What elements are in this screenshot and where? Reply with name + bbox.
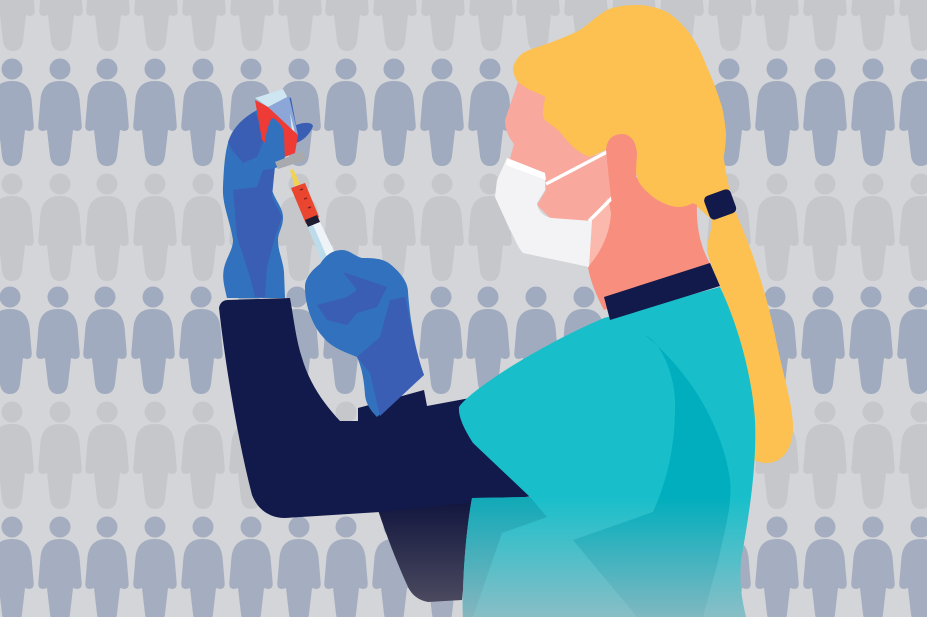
crowd row 3 (pale): [0, 174, 927, 281]
mask side shade: [588, 197, 611, 267]
mask ear straps: [546, 152, 616, 221]
crowd row 2 (blue): [0, 58, 927, 166]
arm sleeve: [219, 298, 535, 518]
crowd row 5 (pale): [0, 402, 927, 509]
hair: [513, 5, 726, 207]
fade overlay at the bottom of the scrub top: [462, 505, 750, 617]
mask top edge: [506, 158, 546, 180]
rear arm shadow panel: [378, 500, 472, 602]
ear: [606, 134, 640, 210]
glove finger behind vial: [285, 96, 313, 143]
vaccine vial: [255, 89, 298, 158]
scrub lower-left fold: [463, 497, 547, 617]
vial light cap: [255, 89, 289, 107]
vial highlight: [290, 113, 295, 133]
nurse figure: [219, 5, 793, 617]
crowd row 6 (blue): [0, 516, 927, 617]
glove knuckle shadow: [317, 272, 387, 325]
plunger band: [305, 215, 320, 227]
crowd row 1 (pale): [0, 0, 927, 51]
glove shadow: [233, 165, 282, 297]
vial metal crimp: [275, 151, 306, 169]
hair tie: [703, 188, 738, 221]
vial label: [255, 100, 298, 158]
barrel with red vaccine: [291, 183, 319, 224]
barrel tick marks: [300, 189, 311, 208]
neck: [588, 134, 712, 310]
mask: [495, 152, 616, 267]
navy arm and cuff: [219, 298, 535, 518]
glove thumb: [265, 118, 285, 170]
clear barrel: [308, 222, 334, 262]
ponytail: [690, 140, 793, 463]
glove wrist shadow: [357, 297, 424, 416]
syringe: [290, 169, 334, 262]
face: [505, 82, 612, 222]
right glove gripping syringe: [305, 250, 424, 417]
scrub fold shadow: [573, 335, 731, 617]
scrub top: [455, 287, 760, 617]
glove upper shadow: [228, 112, 265, 163]
vial glass: [268, 96, 298, 135]
needle: [290, 169, 300, 187]
navy collar: [604, 263, 720, 320]
left glove holding vial: [223, 89, 313, 298]
crowd row 4 (blue): [0, 286, 927, 394]
